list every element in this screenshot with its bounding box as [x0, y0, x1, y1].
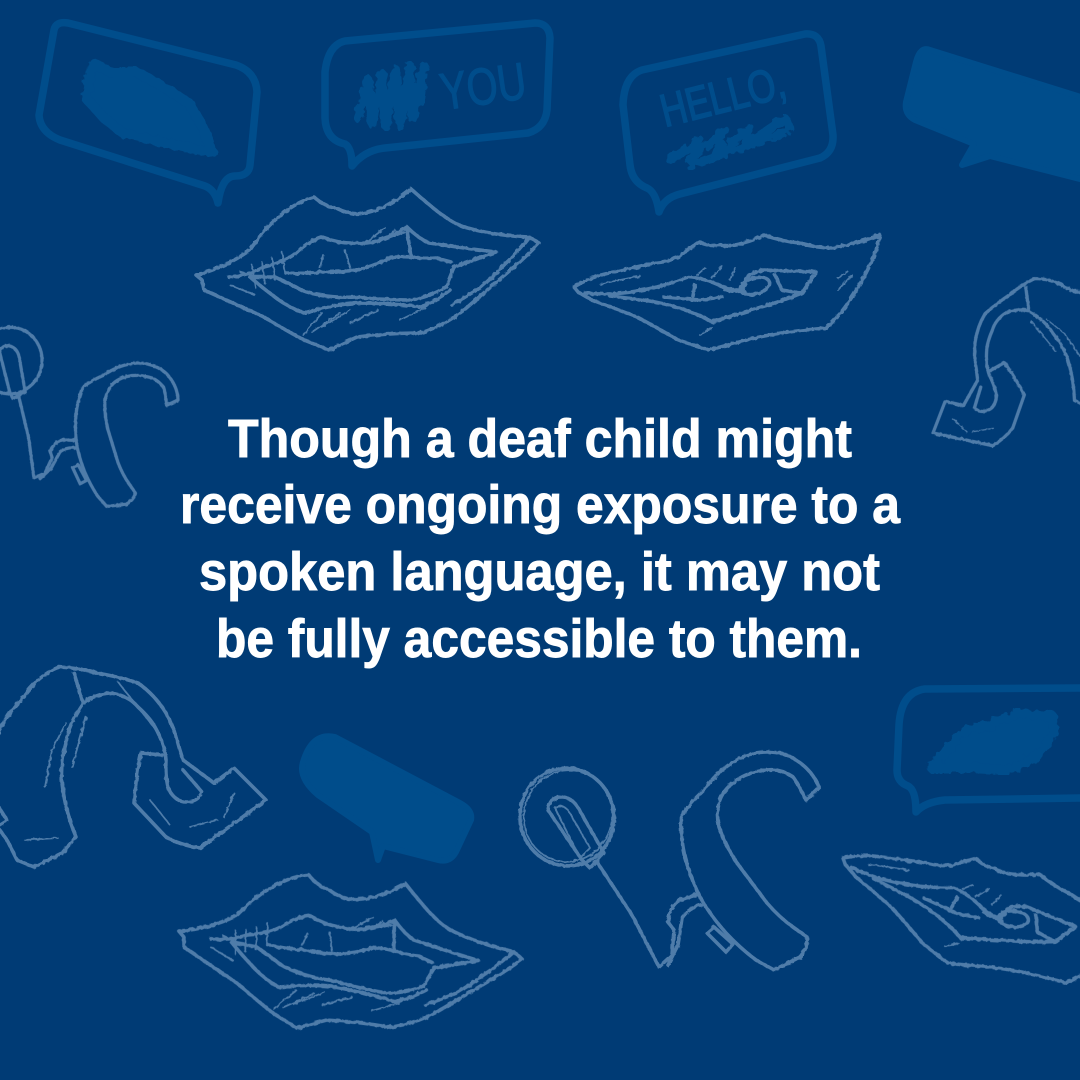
line 2: receive ongoing exposure to a	[180, 475, 901, 535]
hearing aid sketch, left edge	[0, 306, 186, 517]
hearing aid sketch, bottom left	[0, 667, 266, 867]
speech bubble: scribbled words, bottom right	[897, 688, 1080, 812]
speech bubble: "hello,", top centre right	[623, 34, 833, 212]
speech bubble: "hello,", top centre right: HELLO,	[655, 56, 791, 137]
lips sketch, bottom right	[821, 809, 1080, 1022]
lips sketch, bottom centre	[166, 846, 532, 1064]
speech bubble: "you", top centre	[325, 23, 550, 166]
main statement text	[180, 409, 901, 669]
speech bubble: scribbled words, top left	[39, 23, 257, 203]
hearing aid sketch, bottom centre	[511, 752, 819, 970]
line 3: spoken language, it may not	[199, 542, 880, 602]
hearing aid sketch, right edge	[892, 242, 1080, 479]
solid speech bubble, bottom centre	[302, 736, 471, 861]
lips sketch, top centre	[196, 189, 539, 350]
line 1: Though a deaf child might	[228, 409, 852, 469]
line 4: be fully accessible to them.	[216, 609, 862, 669]
solid speech bubble, top right	[906, 49, 1080, 180]
lips sketch, top right	[574, 235, 880, 350]
speech bubble: "you", top centre: YOU	[437, 52, 530, 122]
